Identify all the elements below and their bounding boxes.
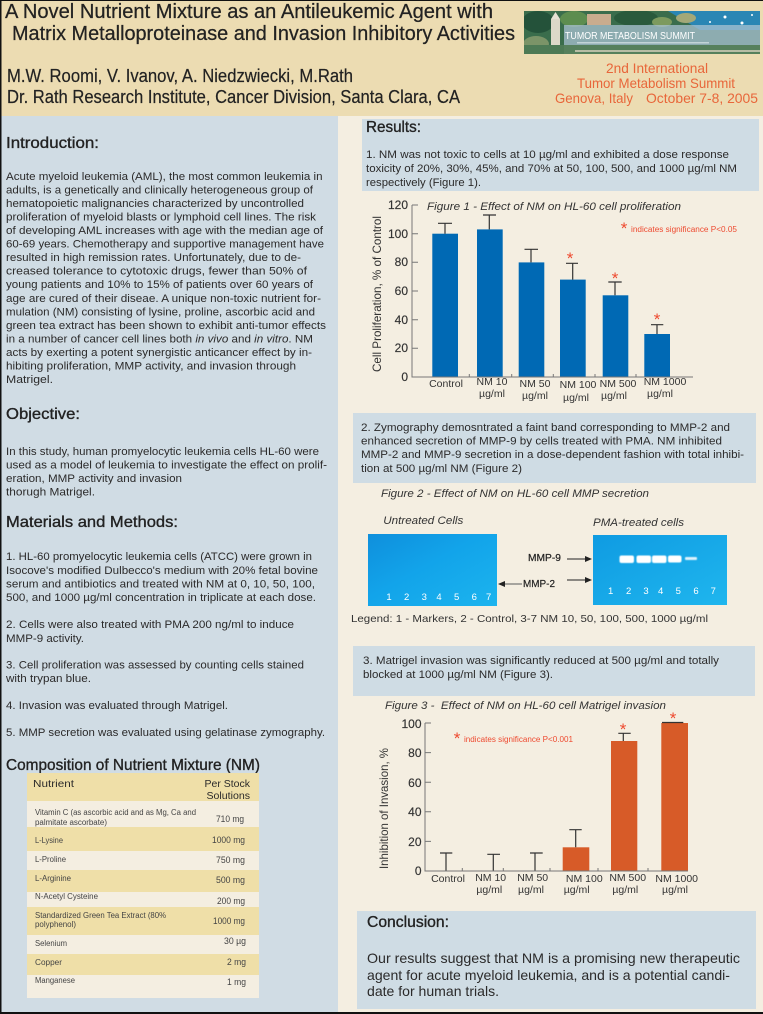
x axis labels — [431, 872, 698, 896]
table: nutrient composition: Manganese — [35, 976, 76, 985]
conference photo banner: TUMOR METABOLISM SUMMIT — [565, 30, 695, 42]
x axis labels: µg/ml — [563, 392, 589, 404]
text: introduction body: of developing AML increases with age with the median age of — [6, 225, 324, 237]
table: nutrient composition: L-Arginine — [35, 874, 72, 883]
title: Matrix Metalloproteinase and Invasion Inhibitory Activities — [12, 23, 515, 45]
y axis tick labels: 100 — [401, 717, 422, 731]
table: nutrient composition: 750 mg — [216, 855, 245, 865]
text: introduction body: in a number of cancer cell lines both in vivo and in vitro. NM — [6, 333, 313, 345]
table: nutrient composition: 1000 mg — [212, 835, 245, 845]
heading: composition of nutrient mixture: Composition of Nutrient Mixture (NM) — [6, 757, 260, 774]
x axis labels: µg/ml — [522, 390, 548, 402]
gel: PMA-treated cells: 2 — [626, 586, 631, 597]
gel: PMA-treated cells — [593, 517, 727, 605]
text: introduction body: age are cured of their diseae. A unique non-toxic nutrient for- — [6, 293, 321, 305]
chart: figure 3 matrigel invasion — [377, 700, 698, 896]
panel: invasion finding: 3. Matrigel invasion was significantly reduced at 500 µg/ml and totally — [363, 655, 719, 667]
gel: PMA-treated cells: 1 — [608, 586, 613, 597]
table: nutrient composition: L-Lysine — [35, 836, 64, 845]
significance markers: * — [620, 720, 627, 739]
panel: zymography finding: tion at 500 µg/ml NM (Figure 2) — [361, 463, 522, 475]
table: nutrient composition: palmitate ascorbate) — [35, 818, 107, 827]
table: nutrient composition: Vitamin C (as ascorbic acid and as Mg, Ca and — [35, 808, 196, 817]
x axis labels: NM 10 — [475, 872, 506, 884]
authors — [7, 66, 460, 107]
figure 2: zymography gels — [351, 488, 727, 625]
y axis tick labels — [401, 717, 422, 878]
text: introduction body: Acute myeloid leukemia (AML), the most common leukemia in — [6, 171, 322, 183]
panel: conclusion: agent for acute myeloid leukemia, and is a potential candi- — [367, 967, 730, 983]
panel: conclusion: date for human trials. — [367, 983, 499, 999]
text: methods list: with trypan blue. — [5, 673, 91, 685]
text: introduction body: creased tolerance to cytotoxic drugs, fewer than 50% of — [6, 266, 308, 278]
significance markers: indicates significance P<0.05 — [631, 225, 738, 234]
heading: objective: Objective: — [6, 406, 80, 423]
gel: PMA-treated cells: 5 — [676, 586, 681, 597]
table: nutrient composition: Selenium — [35, 939, 67, 948]
text: methods list: serum and antibiotics and treated with NM at 0, 10, 50, 100, — [6, 578, 315, 590]
bars — [432, 229, 670, 377]
figure 3 title: Figure 3 - Effect of NM on HL-60 cell Matrigel invasion — [385, 700, 666, 712]
header band — [2, 1, 763, 116]
y axis tick labels: 80 — [395, 255, 408, 269]
panel: zymography finding: enhanced secretion of MMP-9 by cells treated with PMA. NM inhibited — [361, 436, 722, 448]
text: methods list: 5. MMP secretion was evaluated using gelatinase zymography. — [6, 727, 325, 739]
x axis labels: µg/ml — [601, 390, 627, 402]
x axis labels: NM 50 — [520, 378, 551, 390]
table: nutrient composition: 2 mg — [227, 957, 246, 967]
panel: conclusion: Conclusion: — [367, 914, 449, 931]
gel: untreated cells: 5 — [454, 592, 459, 603]
text: methods list: 4. Invasion was evaluated through Matrigel. — [6, 700, 228, 712]
table: nutrient composition: 710 mg — [216, 814, 244, 824]
table: nutrient composition: Per Stock — [204, 778, 251, 790]
significance markers: * — [670, 709, 677, 728]
authors: M.W. Roomi, V. Ivanov, A. Niedzwiecki, M.Rath — [7, 66, 353, 86]
text: introduction body: 60-69 years. Chemotherapy and supportive management have — [6, 239, 324, 251]
conference photo banner — [522, 10, 760, 54]
text: introduction body: resulted in high remission rates. Unfortunately, due to de- — [6, 252, 301, 264]
x axis labels: NM 1000 — [644, 376, 686, 388]
gel: untreated cells: 1 — [386, 592, 392, 603]
table: nutrient composition: Nutrient — [33, 778, 74, 790]
gel: untreated cells: 4 — [436, 592, 442, 603]
text: objective body: used as a model of leukemia to investigate the effect on prolif- — [6, 460, 327, 472]
table: nutrient composition: 500 mg — [216, 875, 245, 885]
table: nutrient composition: Copper — [35, 958, 62, 967]
table: nutrient composition: 1 mg — [227, 977, 246, 987]
conference details: Genova, Italy — [555, 90, 633, 106]
figure 1 title: Figure 1 - Effect of NM on HL-60 cell proliferation — [427, 201, 681, 213]
panel: left column — [2, 116, 338, 1012]
significance markers: * — [621, 219, 628, 238]
table: nutrient composition: Standardized Green Tea Extract (80% — [35, 911, 166, 920]
gel: untreated cells: 2 — [404, 592, 409, 603]
x axis labels: NM 1000 — [655, 873, 698, 885]
panel: invasion finding: blocked at 1000 µg/ml NM (Figure 3). — [363, 669, 553, 681]
text: methods list: MMP-9 activity. — [6, 633, 84, 645]
x axis labels: µg/ml — [612, 884, 638, 896]
y axis label: Inhibition of Invasion, % — [377, 748, 391, 869]
text: objective body: eration, MMP activity and invasion — [6, 473, 182, 485]
text: introduction body: hematopoietic malignancies characterized by uncontrolled — [6, 198, 304, 210]
x axis labels: µg/ml — [479, 388, 505, 400]
label and arrows: MMP-2: MMP-2 — [523, 579, 555, 590]
table: nutrient composition: polyphenol) — [35, 920, 76, 929]
chart: figure 1 cell proliferation — [370, 198, 738, 404]
title: A Novel Nutrient Mixture as an Antileukemic Agent with — [5, 1, 493, 23]
gel: PMA-treated cells: PMA-treated cells — [593, 517, 685, 529]
label and arrow: MMP-9: MMP-9 — [528, 553, 561, 564]
text: methods list — [5, 551, 325, 739]
text: introduction body: Matrigel. — [6, 374, 53, 386]
gel: PMA-treated cells: 7 — [711, 586, 716, 597]
y axis tick labels: 40 — [395, 313, 408, 327]
table: nutrient composition: 1000 mg — [213, 916, 245, 926]
text: introduction body: proliferation of myeloid blasts or lymphoid cell lines. The risk — [6, 212, 316, 224]
table: nutrient composition: L-Proline — [35, 855, 67, 864]
conference details — [555, 60, 758, 106]
x axis labels: NM 500 — [600, 378, 637, 390]
table: nutrient composition — [27, 773, 259, 998]
text: introduction body: young patients and 10% to 15% of patients over 60 years of — [6, 279, 314, 291]
text: introduction body: mulation (NM) consisting of lysine, proline, ascorbic acid and — [6, 306, 315, 318]
table: nutrient composition: 30 µg — [224, 936, 246, 946]
conference details: October 7-8, 2005 — [646, 90, 758, 106]
x axis labels: NM 10 — [477, 376, 508, 388]
label and arrows: MMP-2 — [498, 577, 592, 590]
y axis tick labels: 100 — [388, 227, 408, 241]
panel: results intro: Results: — [366, 119, 421, 136]
text: objective body: thorugh Matrigel. — [6, 486, 95, 498]
text: introduction body: adults, is a genetically and clinically heterogeneous group of — [6, 184, 314, 196]
significance markers: * — [654, 310, 661, 329]
gel: PMA-treated cells: 4 — [658, 586, 663, 597]
x axis labels: NM 100 — [560, 379, 597, 391]
x axis labels: µg/ml — [564, 884, 590, 896]
text: objective body — [6, 446, 327, 498]
significance markers: indicates significance P<0.001 — [464, 735, 574, 744]
text: methods list: 3. Cell proliferation was assessed by counting cells stained — [6, 660, 304, 672]
x axis labels — [429, 376, 686, 404]
error bars — [440, 722, 683, 871]
y axis tick labels: 20 — [408, 835, 422, 849]
y axis label: Cell Proliferation, % of Control — [370, 216, 384, 372]
x axis labels: NM 500 — [609, 872, 646, 884]
error bars — [438, 215, 663, 334]
gel: PMA-treated cells: 3 — [643, 586, 649, 597]
x axis labels: Control — [431, 873, 465, 885]
panel: conclusion: Our results suggest that NM is a promising new therapeutic — [367, 950, 740, 966]
gel: PMA-treated cells: 6 — [693, 586, 699, 597]
x axis labels: NM 50 — [517, 872, 548, 884]
panel: results intro: respectively (Figure 1). — [366, 177, 481, 189]
table: nutrient composition: N-Acetyl Cysteine — [35, 892, 99, 901]
table: nutrient composition: 200 mg — [217, 896, 245, 906]
panel: invasion finding — [353, 646, 755, 696]
significance markers: * — [612, 269, 619, 288]
panel: zymography finding: 2. Zymography demosntrated a faint band corresponding to MMP-2 and — [361, 422, 730, 434]
figure 2 title: Figure 2 - Effect of NM on HL-60 cell MMP secretion — [381, 488, 649, 500]
y axis tick labels: 40 — [408, 805, 422, 819]
panel: results intro — [362, 119, 759, 191]
text: methods list: 1. HL-60 promyelocytic leukemia cells (ATCC) were grown in — [6, 551, 312, 563]
gel: untreated cells: 6 — [472, 592, 477, 603]
significance markers: * — [567, 249, 574, 268]
panel: zymography finding: MMP-2 and MMP-9 secretion in a dose-dependent fashion with total inhibi- — [361, 449, 744, 461]
x axis labels: µg/ml — [647, 388, 673, 400]
x axis labels: NM 100 — [566, 873, 603, 885]
y axis tick labels: 60 — [395, 284, 408, 298]
significance markers — [567, 219, 738, 329]
text: introduction body: acts by exerting a potent synergistic anticancer effect by in- — [6, 347, 312, 359]
panel: results intro: 1. NM was not toxic to cells at 10 µg/ml and exhibited a dose response — [366, 149, 729, 161]
gel legend: Legend: 1 - Markers, 2 - Control, 3-7 NM 10, 50, 100, 500, 1000 µg/ml — [351, 613, 708, 625]
y axis tick labels: 0 — [401, 370, 408, 384]
text: introduction body: hibiting proliferation, MMP activity, and invasion through — [6, 360, 296, 372]
panel: conclusion — [357, 911, 756, 1009]
conference details: 2nd International — [606, 60, 708, 76]
bars — [563, 723, 688, 871]
conference details: Tumor Metabolism Summit — [577, 75, 735, 91]
y axis tick labels: 60 — [408, 776, 422, 790]
significance markers: * — [454, 729, 461, 748]
table: nutrient composition: Solutions — [206, 790, 250, 802]
y axis tick labels: 80 — [408, 746, 422, 760]
panel: results intro: toxicity of 20%, 30%, 45%, and 70% at 50, 100, 500, and 1000 µg/ml NM — [366, 163, 737, 175]
label and arrow: MMP-9 — [528, 553, 592, 564]
heading: materials and methods: Materials and Methods: — [6, 514, 178, 531]
y axis tick labels: 20 — [395, 341, 408, 355]
y axis tick labels: 120 — [388, 198, 408, 212]
axes — [412, 205, 693, 377]
y axis tick labels — [388, 198, 408, 384]
heading: introduction: Introduction: — [6, 135, 99, 152]
text: methods list: 2. Cells were also treated with PMA 200 ng/ml to induce — [6, 619, 294, 631]
gel: untreated cells: 3 — [422, 592, 427, 603]
y axis tick labels: 0 — [415, 864, 422, 878]
title — [5, 1, 515, 45]
text: methods list: 500, and 1000 µg/ml concentration in triplicate at each dose. — [6, 592, 316, 604]
x axis labels: Control — [429, 378, 463, 390]
axes — [425, 723, 688, 871]
x axis labels: µg/ml — [518, 884, 544, 896]
gel: untreated cells: 7 — [486, 592, 491, 603]
panel: zymography finding — [353, 413, 756, 483]
gel: untreated cells — [368, 515, 497, 606]
text: methods list: Isocove's modified Dulbecco's medium with 20% fetal bovine — [6, 565, 318, 577]
text: objective body: In this study, human promyelocytic leukemia cells HL-60 were — [6, 446, 319, 458]
text: introduction body — [6, 171, 326, 386]
x axis labels: µg/ml — [662, 884, 688, 896]
significance markers — [454, 709, 677, 748]
text: introduction body: green tea extract has been shown to exhibit anti-tumor effects — [6, 320, 326, 332]
authors: Dr. Rath Research Institute, Cancer Division, Santa Clara, CA — [7, 87, 460, 107]
gel: untreated cells: Untreated Cells — [383, 515, 464, 527]
x axis labels: µg/ml — [476, 884, 502, 896]
